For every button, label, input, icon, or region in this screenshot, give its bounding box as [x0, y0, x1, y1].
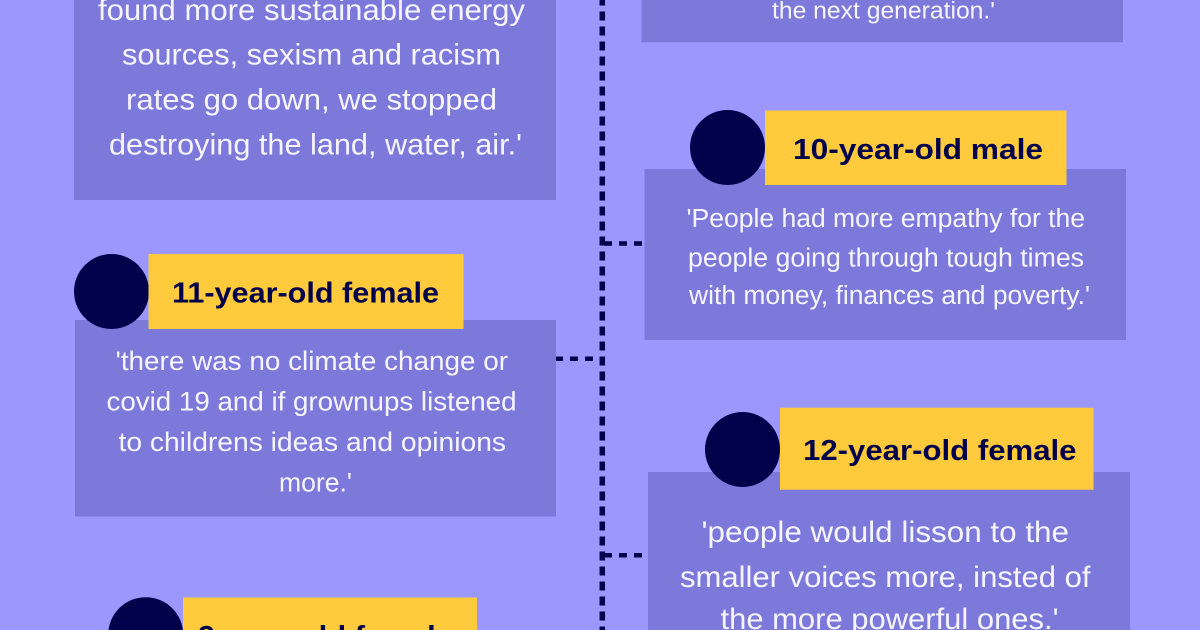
- label: 12-year-old female: [780, 408, 1094, 490]
- connector: 10-year-old male: [604, 241, 643, 246]
- dotted timeline spine: [600, 0, 605, 630]
- label: 9-year-old female: [183, 598, 477, 630]
- quote text: smaller voices: smaller voices more, insted of: [680, 561, 1091, 594]
- label: 10-year-old male: 10-year-old male: [793, 134, 1043, 166]
- quote text: climate change: [106, 346, 516, 498]
- quote text: sustainable energy: destroying the land, water, air.': [109, 128, 522, 162]
- icon: avatar 12-year-old female: [705, 412, 780, 487]
- quote text: smaller voices: 'people would lisson to the: [702, 516, 1069, 549]
- quote text: sustainable energy: [98, 0, 525, 162]
- label: 11-year-old female: 11-year-old female: [172, 277, 439, 309]
- connector: 12-year-old female: [604, 553, 643, 558]
- quote text: climate change: covid 19 and if grownups listened: [106, 386, 516, 416]
- quote text: sustainable energy: sources, sexism and racism: [122, 38, 501, 72]
- quote text: smaller voices: [680, 516, 1091, 630]
- label: 12-year-old female: 12-year-old female: [803, 435, 1076, 467]
- label: 11-year-old female: [148, 254, 464, 329]
- quote text: empathy: people going through tough times: [688, 244, 1084, 272]
- icon: avatar 9-year-old female: [108, 597, 183, 630]
- quote text: empathy: 'People had more empathy for the: [686, 205, 1085, 233]
- panel: 12-year-old female quote: [648, 472, 1130, 630]
- label: 10-year-old male: [765, 110, 1066, 185]
- quote text: climate change: 'there was no climate change or: [116, 346, 508, 376]
- quote text: climate change: to childrens ideas and opinions: [118, 427, 506, 457]
- icon: avatar 11-year-old female: [74, 254, 149, 329]
- connector: 11-year-old female: [555, 356, 600, 361]
- quote text: empathy: with money, finances and poverty.': [688, 282, 1090, 310]
- quote text: sustainable energy: rates go down, we stopped: [126, 84, 497, 116]
- panel: top-left quote: [74, 0, 556, 200]
- panel: 10-year-old male quote: [644, 169, 1126, 340]
- icon: avatar 10-year-old male: [690, 110, 765, 185]
- panel: 11-year-old female quote: [75, 320, 556, 516]
- quote text: climate change: more.': [279, 468, 352, 498]
- quote text: empathy: [686, 205, 1090, 310]
- panel: top-right quote: [642, 0, 1123, 42]
